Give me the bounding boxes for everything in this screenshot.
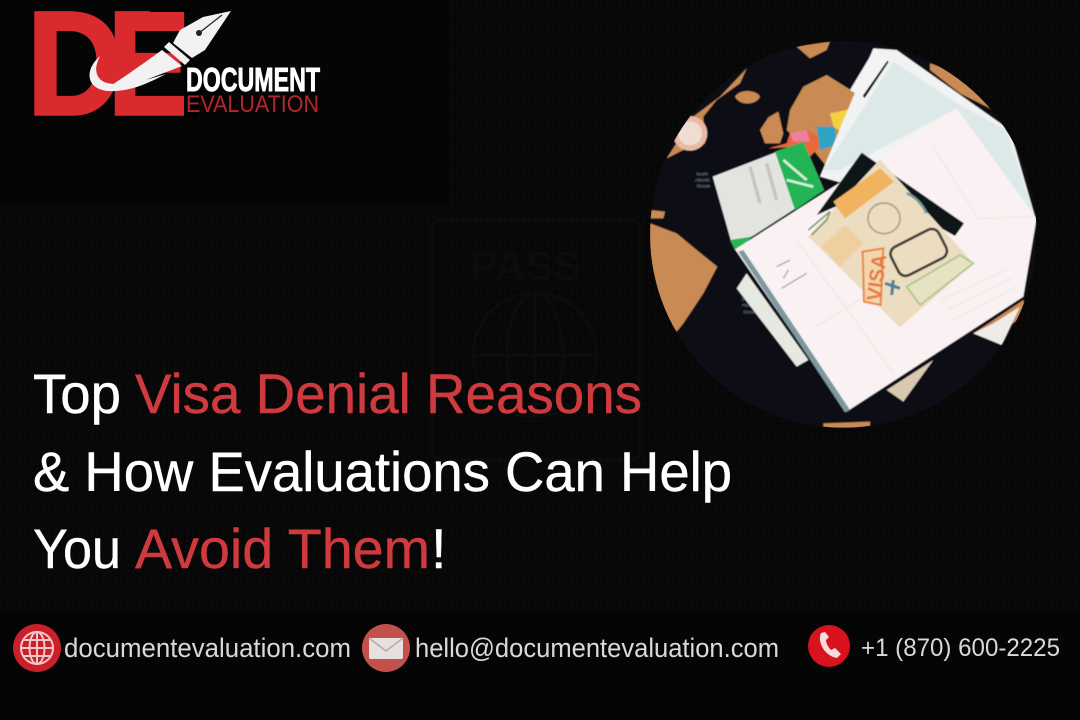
icon: phone: [808, 625, 850, 667]
logo letters DE: [27, 0, 198, 146]
email: hello@documentevaluation.com: [415, 633, 779, 663]
website: documentevaluation.com: [64, 633, 351, 663]
folded city map: [713, 142, 824, 250]
map labels: [695, 172, 758, 314]
headline line 3: Avoid Them: [135, 517, 430, 580]
headline line 1: Top: [33, 362, 121, 425]
headline: [33, 362, 732, 580]
scratch map continents: [650, 42, 1027, 430]
circular photo: passport, planner and scratch map: [650, 41, 1036, 428]
black passport behind: [817, 153, 964, 236]
passport cover with stamps: [808, 159, 973, 327]
map labels: Atlantic: [695, 178, 711, 183]
headline line 1: Visa Denial Reasons: [135, 362, 642, 425]
stamp label: VISA: [863, 253, 891, 302]
logo: [27, 0, 320, 146]
map labels: Ocean: [743, 309, 757, 314]
icon: globe: [13, 624, 61, 672]
map labels: Ocean: [697, 184, 711, 189]
map labels: North: [697, 172, 708, 177]
logo wordmark: DOCUMENT: [186, 61, 320, 98]
compass: [673, 116, 707, 151]
contact bar: [13, 624, 1060, 672]
back map sheet: [820, 48, 1035, 230]
faint passport watermark: [432, 220, 640, 460]
icon: fountain pen: [90, 11, 231, 91]
logo wordmark: EVALUATION: [186, 91, 319, 118]
colored countries: [768, 130, 820, 160]
headline line 3: !: [431, 517, 447, 580]
map labels: South: [742, 297, 754, 302]
map labels: Atlantic: [742, 303, 758, 308]
headline line 2: & How Evaluations Can Help: [33, 440, 732, 503]
headline line 3: You: [33, 517, 121, 580]
logo wordmark: [186, 61, 320, 118]
phone number: +1 (870) 600-2225: [861, 634, 1060, 662]
icon: envelope: [362, 624, 410, 672]
faint passport watermark: PASS: [470, 242, 581, 289]
open planner: [735, 108, 1037, 412]
